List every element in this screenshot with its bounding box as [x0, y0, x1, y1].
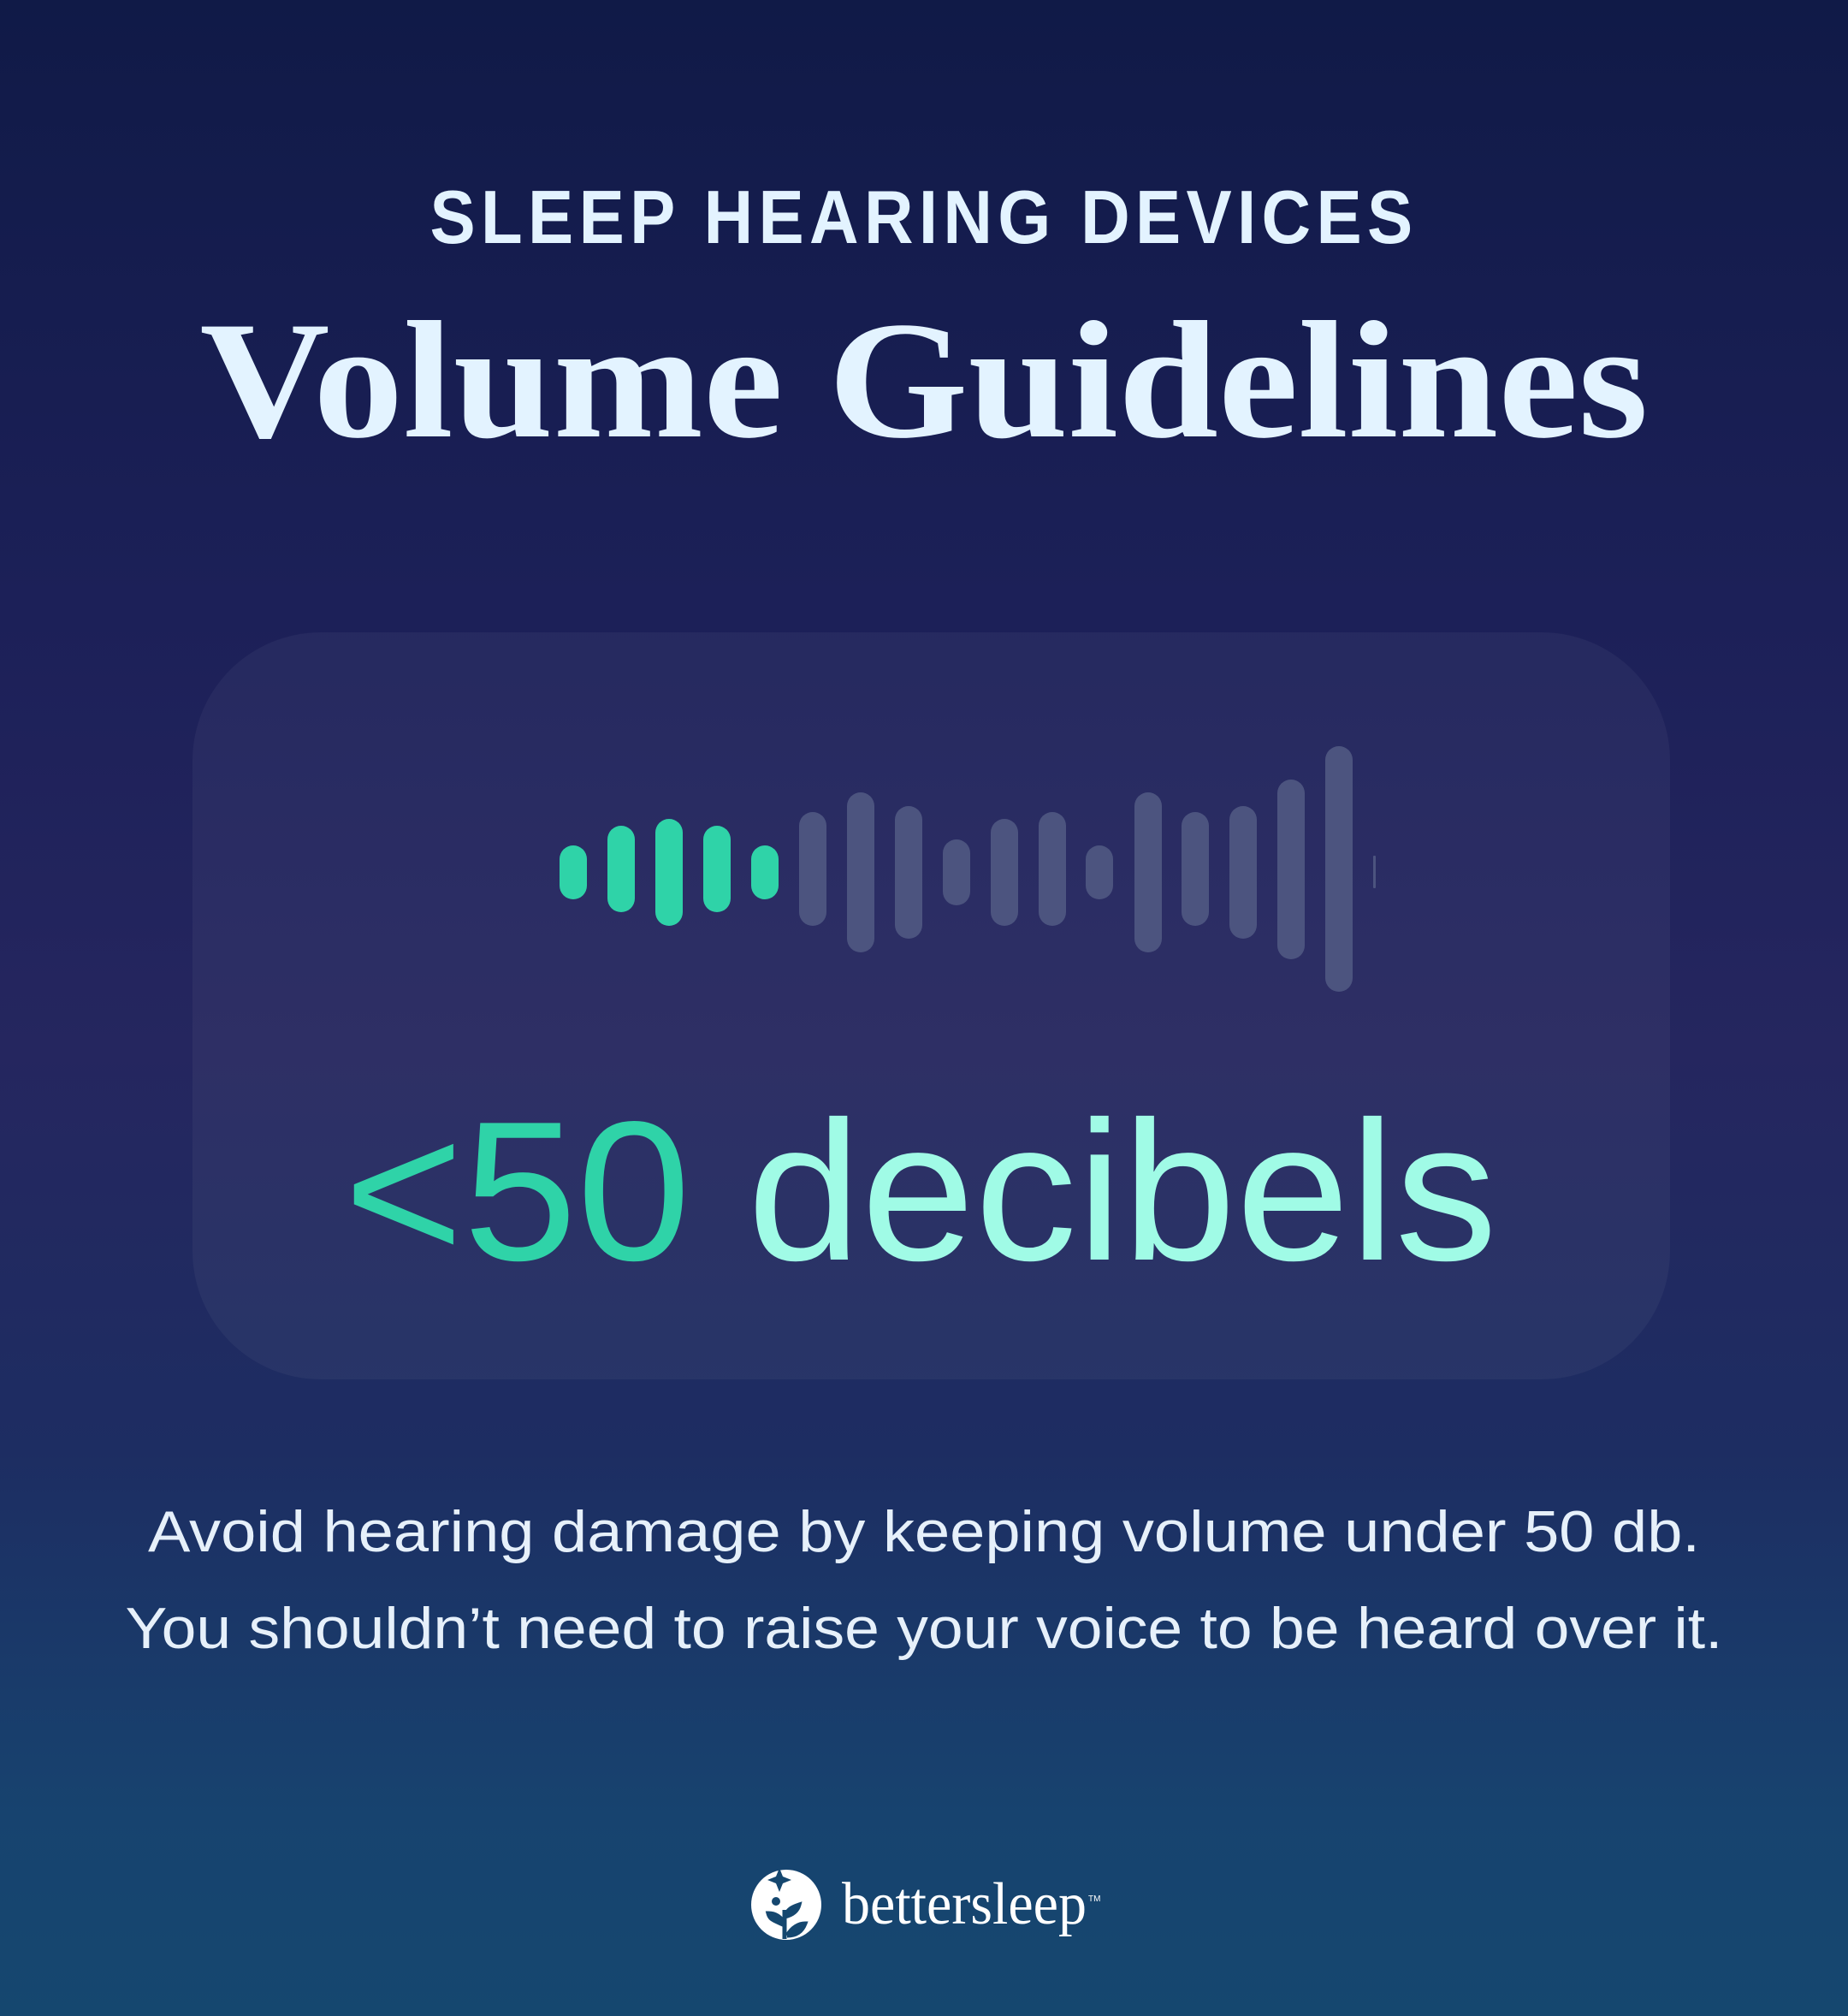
subtitle: SLEEP HEARING DEVICES: [429, 175, 1419, 259]
icon: sprout in circle: [751, 1868, 821, 1940]
logo: bettersleep: TM: [1088, 1894, 1100, 1904]
big number: <50 decibels: <50 decibels: [344, 1081, 1497, 1302]
logo: bettersleep: bettersleep: [842, 1871, 1087, 1937]
title: Volume Guidelines: [200, 288, 1648, 473]
body text: [125, 1499, 1723, 1661]
body text: You shouldn’t need to raise your voice to be heard over it.: [125, 1596, 1723, 1661]
logo: bettersleep: [751, 1868, 1100, 1940]
chart: sound waveform: [560, 746, 1376, 992]
body text: Avoid hearing damage by keeping volume under 50 db.: [148, 1499, 1700, 1564]
panel: decibel card: [192, 632, 1670, 1379]
